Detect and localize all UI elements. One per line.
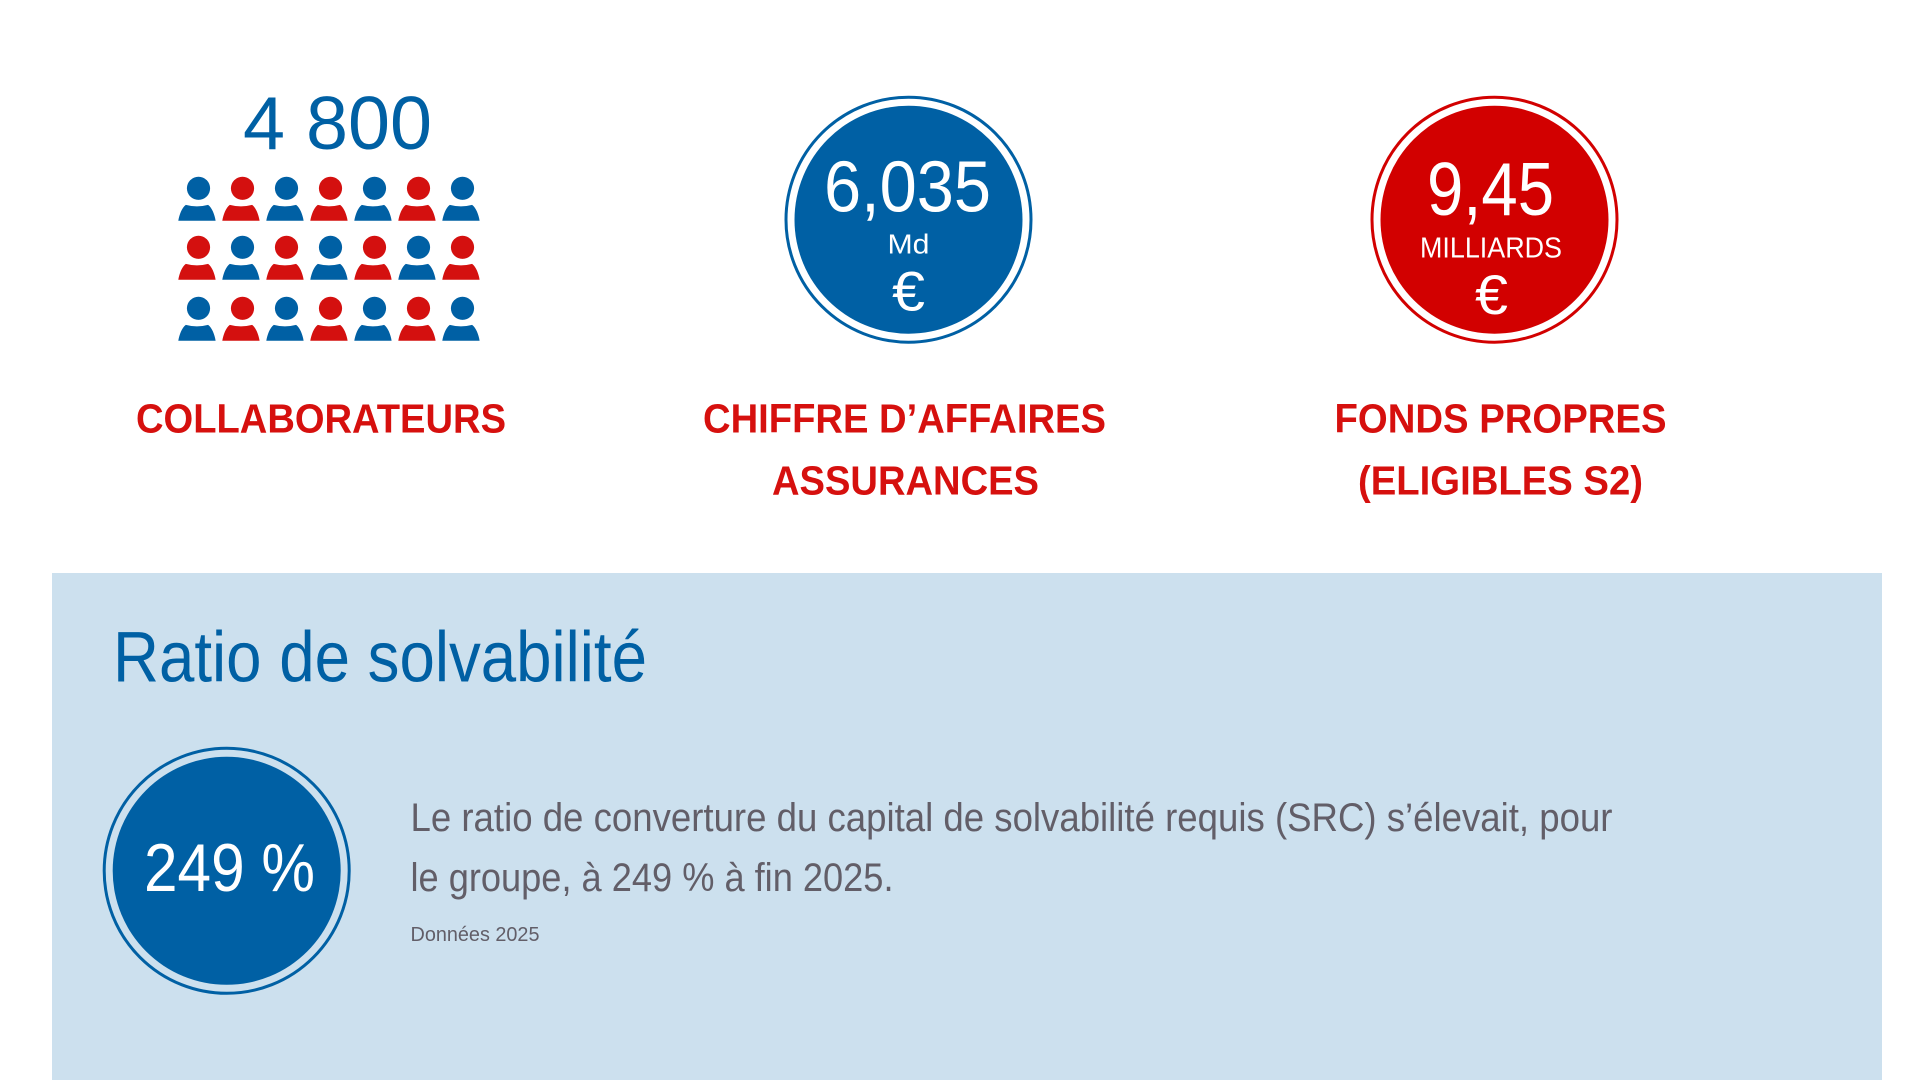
label: fonds propres eligibles s2: FONDS PROPRES [1334, 396, 1666, 442]
description text [410, 796, 1612, 900]
people icons [178, 177, 480, 341]
red circle badge: MILLIARDS [1420, 232, 1562, 264]
heading: Ratio de solvabilité [113, 619, 647, 698]
label: fonds propres eligibles s2 [1334, 396, 1666, 504]
red circle badge: € [1475, 263, 1508, 326]
stat: collaborateurs [136, 81, 506, 442]
description text: Le ratio de converture du capital de solvabilité requis (SRC) s’élevait, pour [410, 796, 1612, 840]
number: 4 800: 4 800 [243, 81, 432, 165]
label: fonds propres eligibles s2: (ELIGIBLES S2) [1358, 458, 1643, 504]
blue circle badge: Md [888, 228, 930, 259]
label: chiffre d'affaires assurances [703, 396, 1106, 504]
stat: chiffre d'affaires [703, 97, 1106, 503]
description text: le groupe, à 249 % à fin 2025. [410, 856, 894, 900]
circle badge: 249 % [104, 748, 349, 993]
red circle badge [1372, 97, 1617, 342]
blue circle badge [786, 97, 1031, 342]
panel background [52, 573, 1882, 1080]
blue circle badge: 6,035 [824, 148, 991, 228]
label: chiffre d'affaires assurances: ASSURANCES [772, 458, 1039, 504]
panel: ratio de solvabilité [52, 573, 1882, 1080]
blue circle badge: € [892, 260, 925, 322]
label: collaborateurs: COLLABORATEURS [136, 396, 506, 442]
source note: Données 2025 [410, 923, 540, 946]
red circle badge: 9,45 [1427, 147, 1554, 231]
stat: fonds propres [1334, 97, 1666, 503]
circle badge: 249 %: 249 % [144, 830, 315, 906]
label: chiffre d'affaires assurances: CHIFFRE D’AFFAIRES [703, 396, 1106, 442]
